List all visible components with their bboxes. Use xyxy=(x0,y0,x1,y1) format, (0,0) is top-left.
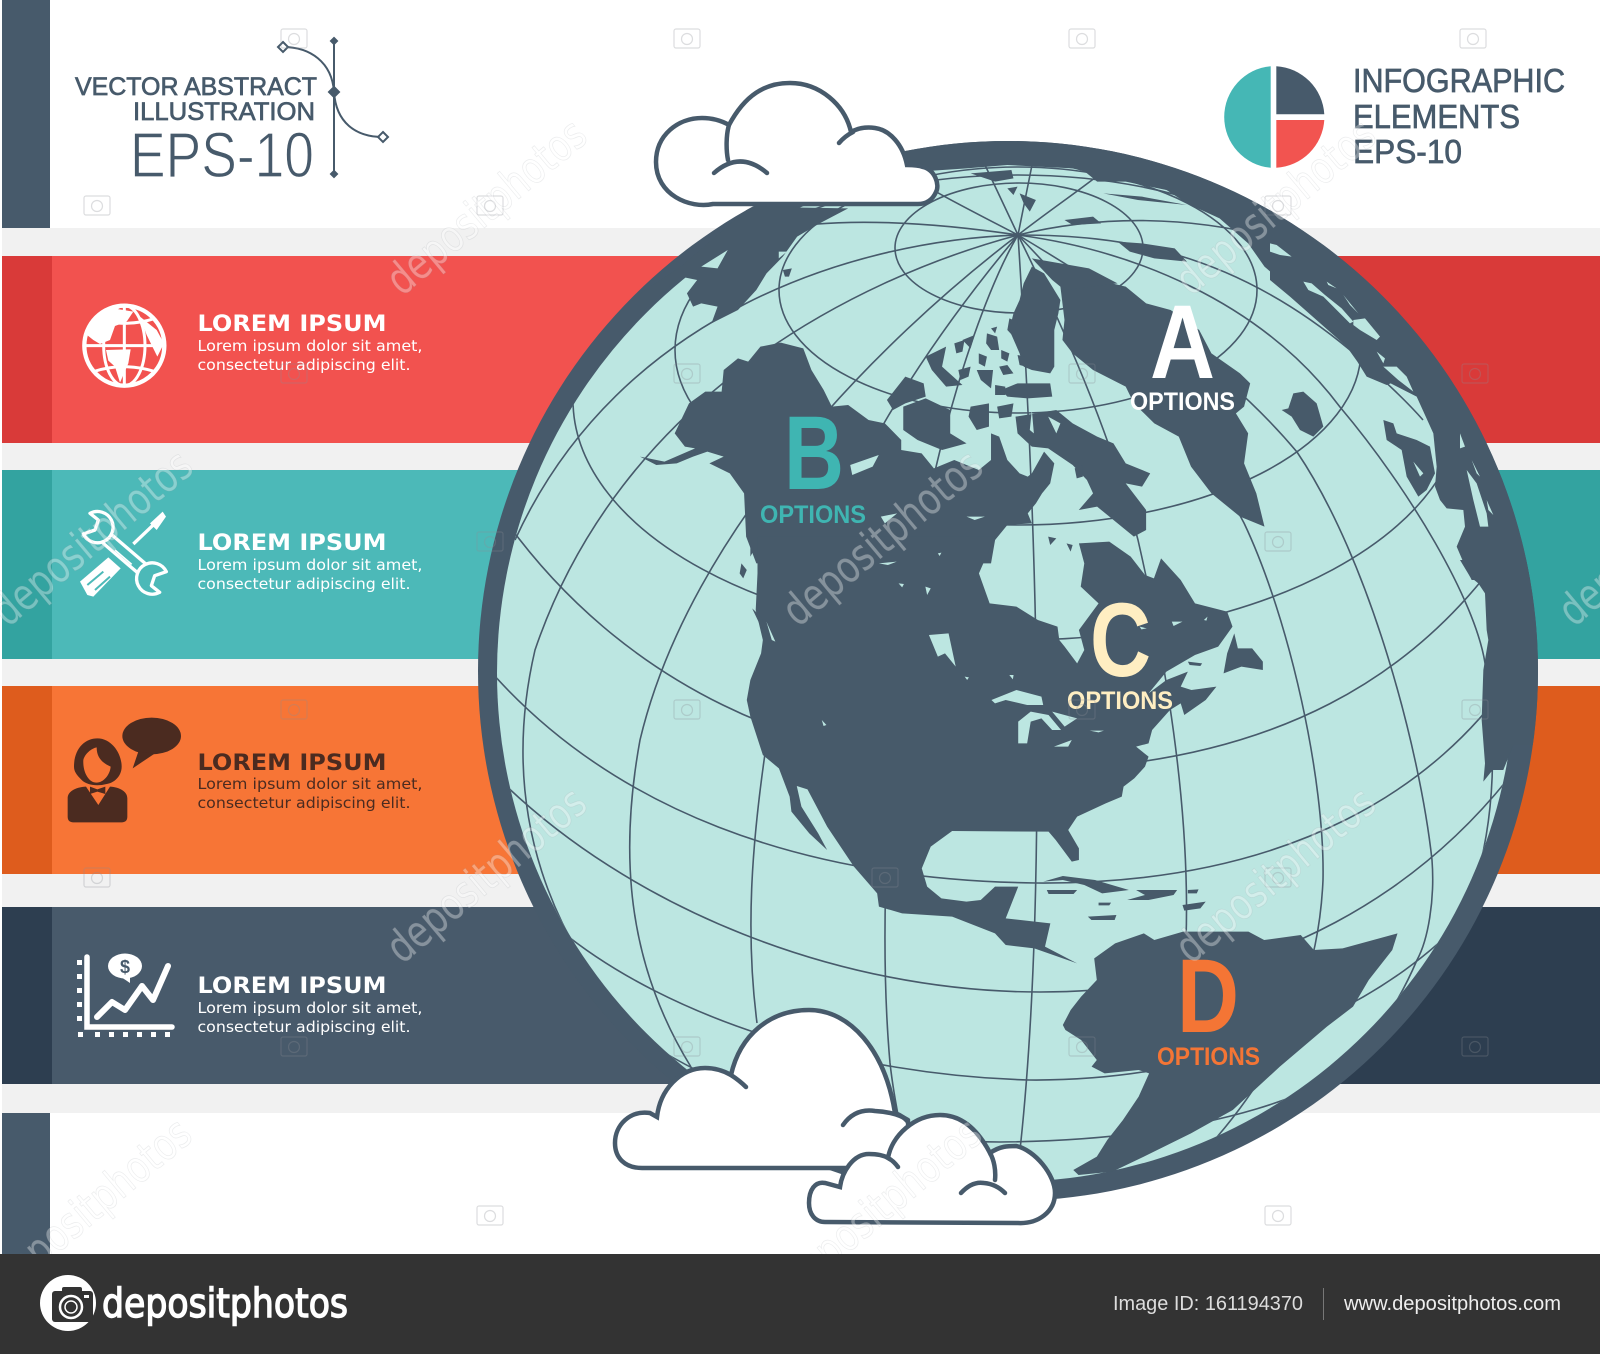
label: option A: OPTIONS xyxy=(1130,388,1235,416)
footer image id: Image ID: 161194370 xyxy=(1113,1293,1303,1315)
land: Canada and Alaska xyxy=(640,343,1054,563)
globe xyxy=(478,140,1560,1201)
heading: infographic elements: ELEMENTS xyxy=(1353,98,1520,135)
text: orange band copy xyxy=(198,751,422,812)
seas: Europe and Africa xyxy=(1270,243,1493,527)
watermark: depositphotos diagonal text: depositphotos xyxy=(376,109,597,305)
graticule xyxy=(485,160,1515,1170)
text: teal band copy: consectetur adipiscing elit. xyxy=(198,575,410,593)
globe rim xyxy=(478,141,1538,1201)
lakes and seas xyxy=(701,243,1493,747)
bottom left sidebar block xyxy=(2,1113,50,1254)
text: red band copy: consectetur adipiscing elit. xyxy=(198,356,410,374)
label: option D: OPTIONS xyxy=(1157,1043,1260,1071)
text: teal band copy: LOREM IPSUM xyxy=(198,531,386,556)
land: Europe and Africa limb upper xyxy=(1270,210,1530,580)
heading: infographic elements: EPS-10 xyxy=(1353,133,1462,170)
label: option D: D xyxy=(1177,938,1239,1055)
lakes: Northern Canada xyxy=(701,250,1060,523)
lakes: North America xyxy=(766,553,1207,747)
cloud: bottom large xyxy=(615,1010,910,1168)
cloud: bottom small xyxy=(809,1115,1055,1223)
heading: vector abstract illustration: ILLUSTRATION xyxy=(133,98,315,126)
text: red band copy: LOREM IPSUM xyxy=(198,312,386,337)
label: option D xyxy=(1157,938,1260,1071)
land: United States, Mexico, Central America and Quebec xyxy=(740,537,1263,963)
text: orange band copy: LOREM IPSUM xyxy=(198,751,386,776)
watermark: depositphotos diagonal text: depositphotos xyxy=(771,1108,992,1304)
footer logo camera xyxy=(40,1275,96,1331)
watermark: depositphotos diagonal text: depositphotos xyxy=(772,440,993,636)
footer bar xyxy=(0,1254,1600,1354)
label: option B: OPTIONS xyxy=(760,501,866,529)
text: orange band copy: Lorem ipsum dolor sit amet, xyxy=(198,775,422,793)
watermark: depositphotos diagonal text: depositphotos xyxy=(376,777,597,973)
label: option C: OPTIONS xyxy=(1067,687,1173,715)
icon: rising chart with dollar bubble xyxy=(77,954,172,1037)
land: South America xyxy=(1063,932,1398,1175)
label: option B: B xyxy=(784,395,844,512)
panel: red band xyxy=(2,256,1600,443)
land: Africa limb lower xyxy=(1460,560,1538,782)
label: option A: A xyxy=(1150,284,1215,401)
text: navy band copy xyxy=(198,974,422,1036)
panel: teal band xyxy=(2,470,1600,659)
icon: pie chart xyxy=(1224,66,1324,168)
globe ocean xyxy=(497,164,1515,1182)
land: Arctic islands, Greenland, Siberia xyxy=(640,140,1280,552)
cloud: top xyxy=(656,83,937,205)
text: orange band copy: consectetur adipiscing elit. xyxy=(198,794,410,812)
label: option B xyxy=(760,395,866,529)
footer url: www.depositphotos.com xyxy=(1343,1293,1561,1315)
text: navy band copy: Lorem ipsum dolor sit amet, xyxy=(198,999,422,1017)
heading: infographic elements xyxy=(1353,62,1565,170)
icon: person with speech bubble xyxy=(68,718,181,822)
heading: vector abstract illustration: VECTOR ABSTRACT xyxy=(75,73,317,101)
heading: vector abstract illustration: EPS-10 xyxy=(130,119,314,191)
text: navy band copy: LOREM IPSUM xyxy=(198,974,386,999)
icon: wrench and screwdriver xyxy=(80,511,166,597)
heading: infographic elements: INFOGRAPHIC xyxy=(1353,62,1565,99)
text: red band copy: Lorem ipsum dolor sit amet, xyxy=(198,337,422,355)
heading: vector abstract illustration xyxy=(75,73,317,191)
footer separator xyxy=(1323,1288,1324,1320)
icon: bezier curve handle xyxy=(278,38,388,177)
watermark: depositphotos diagonal text: depositphotos xyxy=(1165,109,1386,305)
text: navy band copy: consectetur adipiscing elit. xyxy=(198,1018,410,1036)
text: teal band copy: Lorem ipsum dolor sit amet, xyxy=(198,556,422,574)
label: option C xyxy=(1067,582,1173,715)
top left sidebar block xyxy=(2,0,50,228)
label: option C: C xyxy=(1090,582,1151,699)
light grey band dividers xyxy=(2,228,1600,1113)
icon: rising chart with dollar bubble: $ xyxy=(120,957,130,977)
footer logo wordmark: depositphotos xyxy=(102,1281,348,1327)
watermark: depositphotos diagonal text: depositphotos xyxy=(1165,777,1386,973)
panel: navy band xyxy=(2,907,1600,1084)
land masses xyxy=(640,140,1560,1175)
watermark: camera marks xyxy=(84,29,1488,1225)
text: red band copy xyxy=(198,312,422,374)
text: teal band copy xyxy=(198,531,422,593)
label: option A xyxy=(1130,284,1235,416)
icon: globe xyxy=(84,306,164,386)
panel: orange band xyxy=(2,686,1600,874)
